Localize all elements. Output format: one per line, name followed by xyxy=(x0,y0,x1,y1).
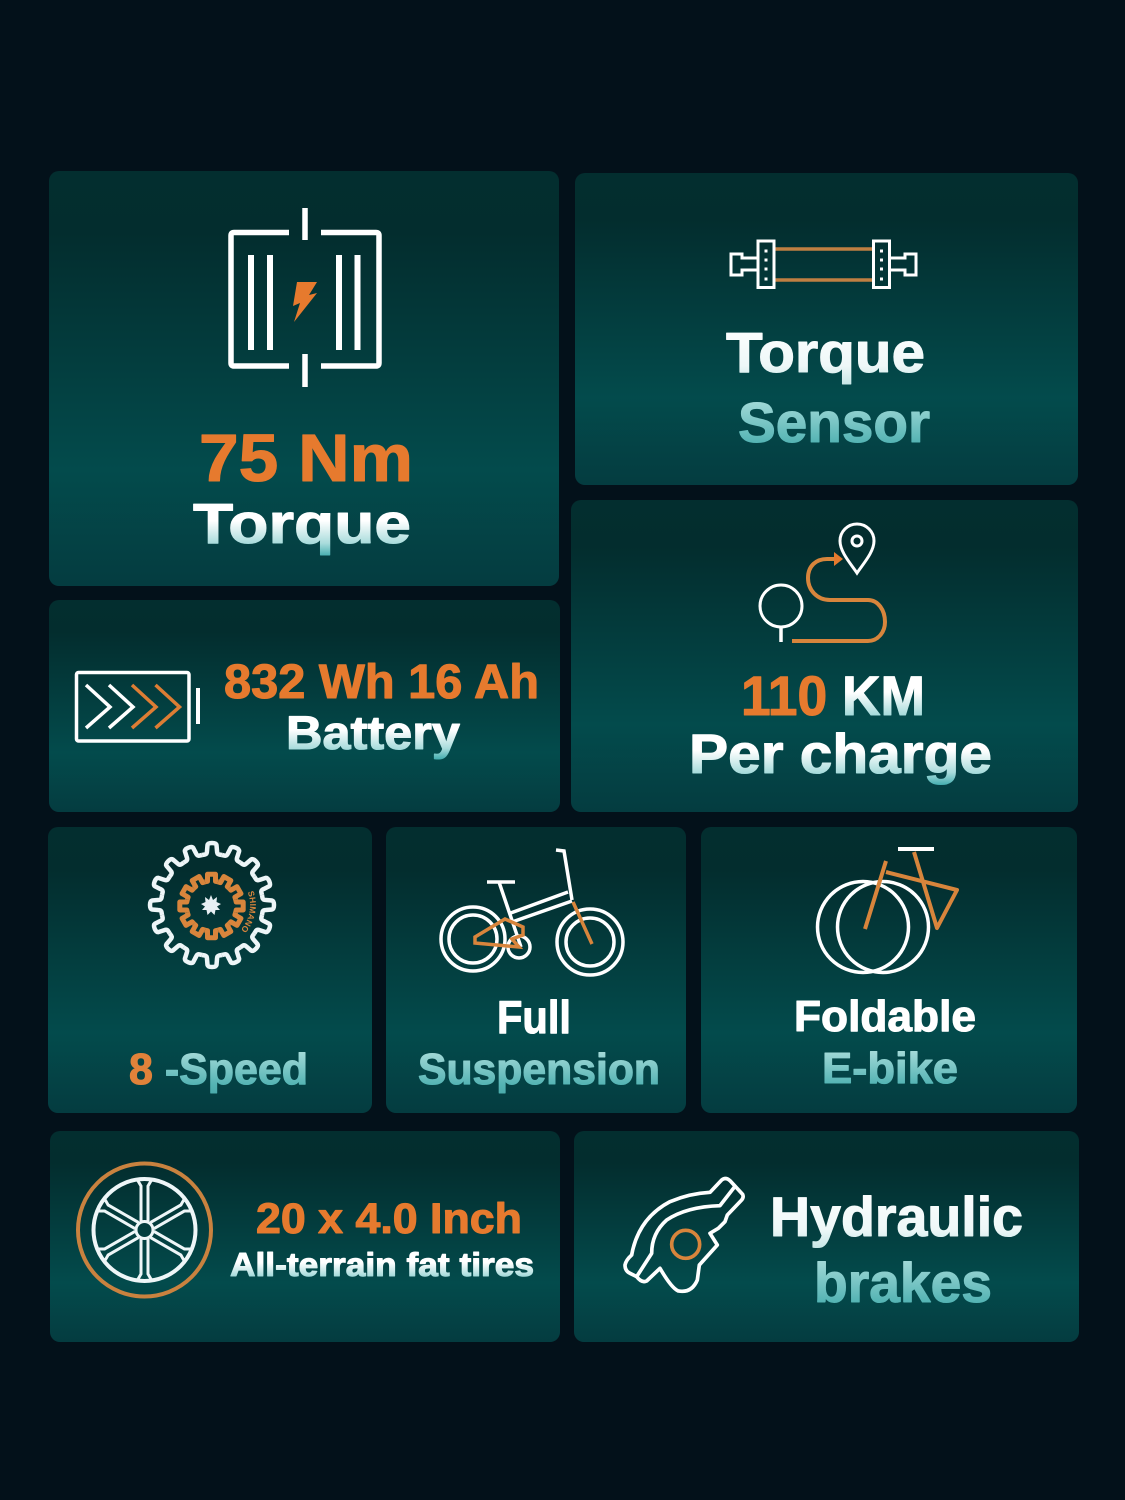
panel: foldable e-bike xyxy=(701,827,1077,1113)
heading: Torque: Torque xyxy=(726,321,925,385)
icon: full suspension bike xyxy=(441,850,623,975)
icon: motor with lightning bolt xyxy=(231,208,379,387)
heading: brakes: brakes xyxy=(814,1251,992,1314)
panel: fat tires xyxy=(50,1131,560,1342)
heading: Torque: Torque xyxy=(193,492,411,556)
heading: 110 KM: 110 KM xyxy=(741,664,925,727)
panel: range per charge xyxy=(571,500,1078,812)
heading: Per charge: Per charge xyxy=(689,722,992,785)
icon: Shimano gear cassette xyxy=(148,840,276,970)
label: Suspension: Suspension xyxy=(418,1045,660,1094)
icon: wheel xyxy=(78,1164,211,1296)
label: 8-Speed: 8 -Speed xyxy=(129,1045,308,1094)
icon: Shimano gear cassette: SHIMANO xyxy=(242,891,256,932)
panel: 8-speed xyxy=(48,827,372,1113)
icon: torque sensor xyxy=(731,241,916,288)
label: E-bike: E-bike xyxy=(822,1044,958,1093)
heading: Hydraulic: Hydraulic xyxy=(770,1185,1023,1248)
icon: route from start to pin xyxy=(760,524,885,642)
label: Foldable: Foldable xyxy=(794,992,976,1041)
heading: 75 Nm: 75 Nm xyxy=(199,421,413,496)
icon: hydraulic brake caliper xyxy=(625,1178,743,1291)
panel: 75 Nm torque xyxy=(49,171,559,586)
heading: Battery: Battery xyxy=(286,706,460,759)
heading: Sensor: Sensor xyxy=(738,391,930,455)
icon: folded bike xyxy=(818,849,957,972)
heading: 832 Wh 16 Ah: 832 Wh 16 Ah xyxy=(224,656,539,709)
panel: torque sensor xyxy=(575,173,1078,485)
label: Full: Full xyxy=(497,991,571,1043)
panel: battery xyxy=(49,600,560,812)
heading: 20 x 4.0 Inch: 20 x 4.0 Inch xyxy=(256,1195,522,1243)
panel: full suspension xyxy=(386,827,686,1113)
panel: hydraulic brakes xyxy=(574,1131,1079,1342)
icon: battery with chevrons xyxy=(76,672,198,741)
text: All-terrain fat tires: All-terrain fat tires xyxy=(230,1246,534,1283)
